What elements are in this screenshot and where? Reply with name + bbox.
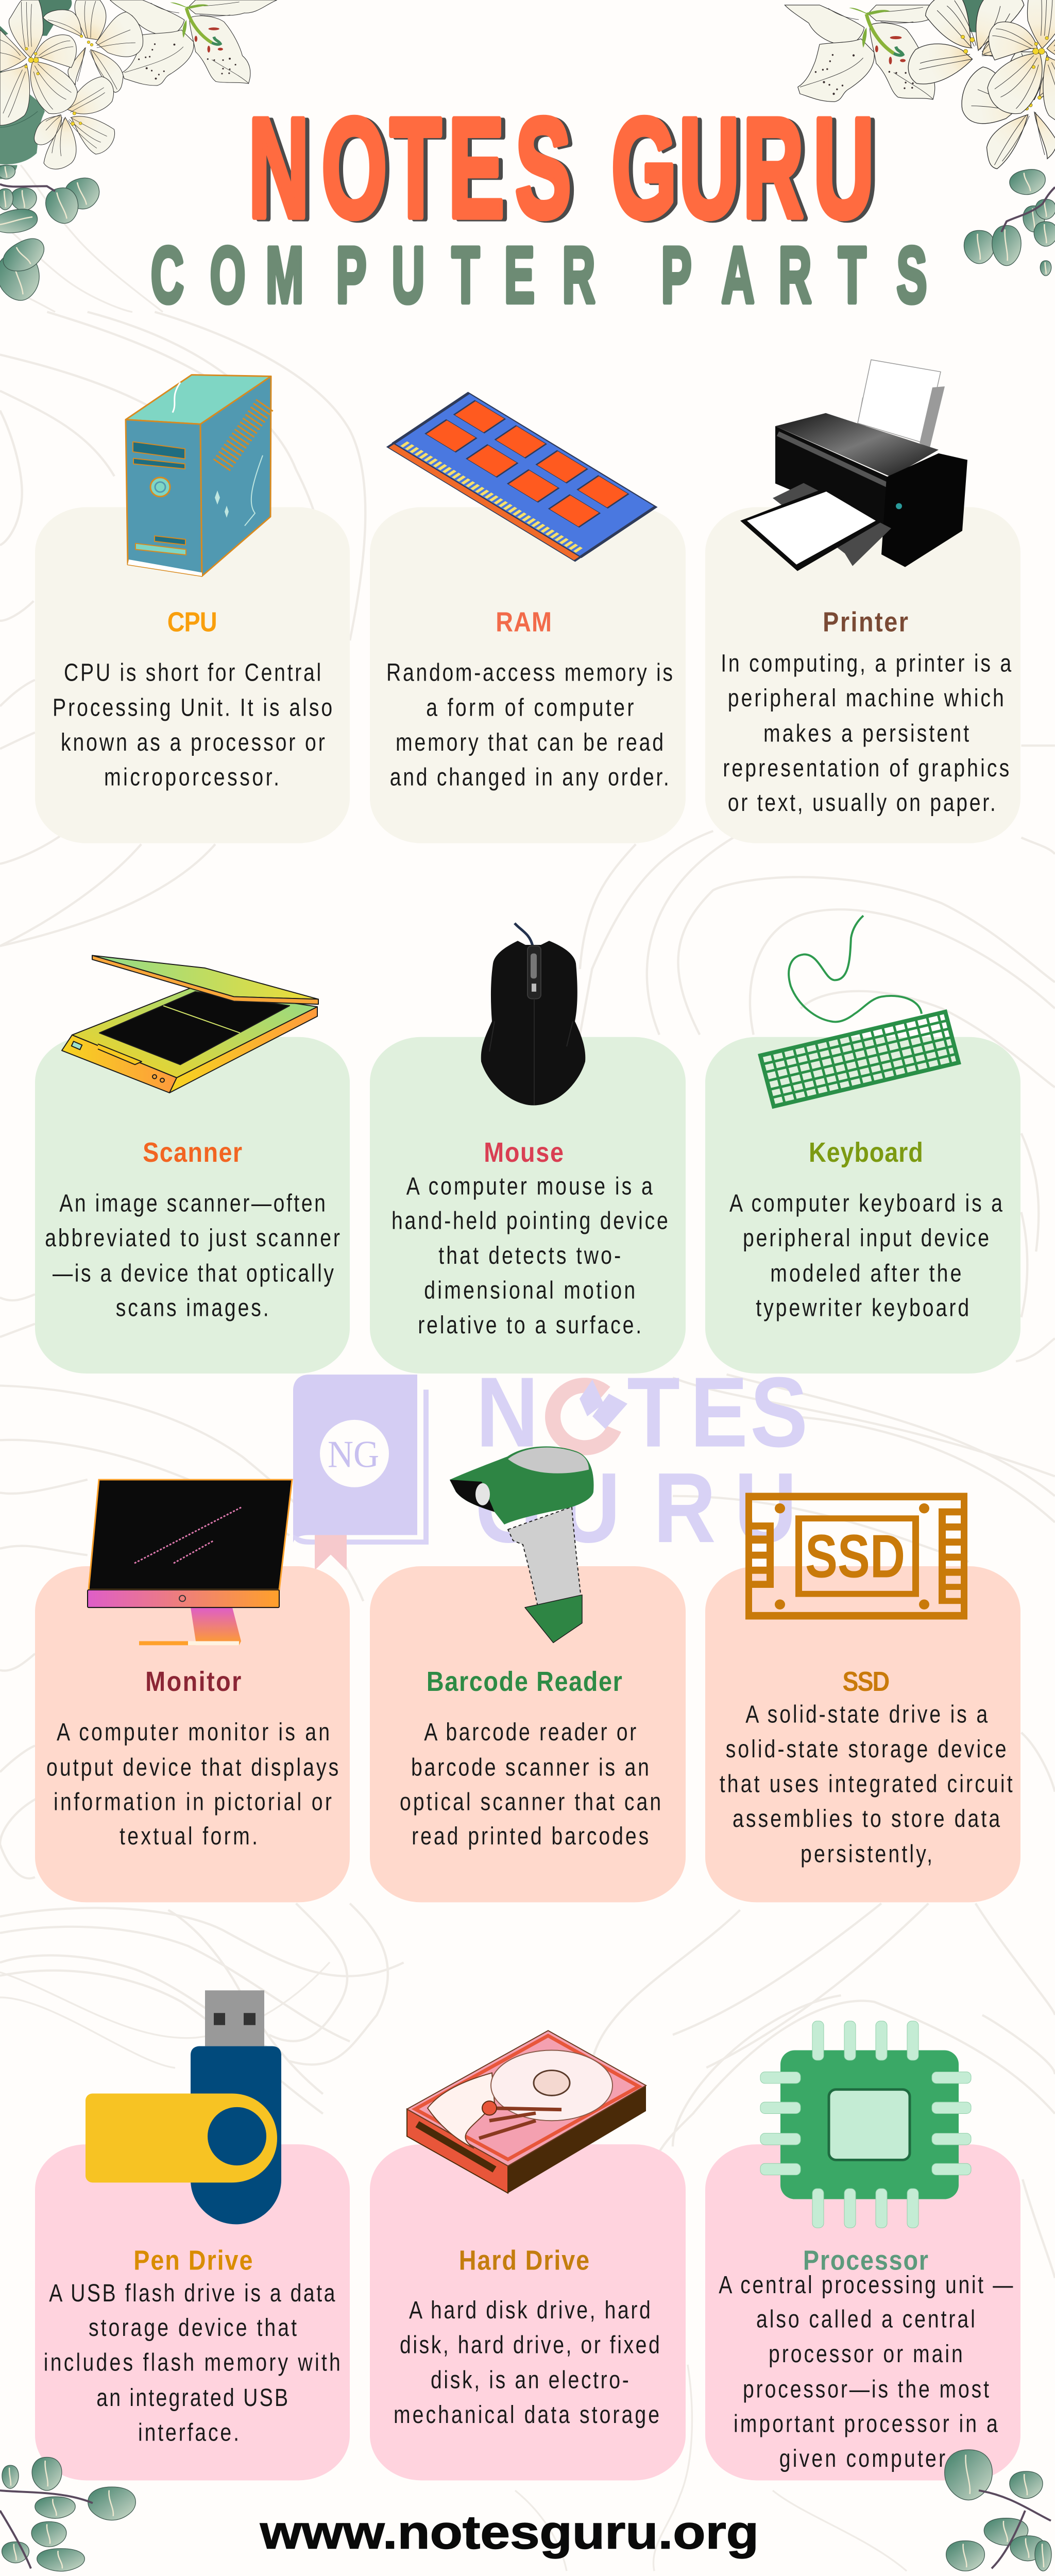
card background (370, 507, 686, 843)
description: Mouse: dimensional motion (424, 1277, 635, 1304)
heading: Barcode Reader: Barcode Reader (427, 1666, 622, 1697)
panel: Processor (705, 2021, 1020, 2480)
description: Keyboard (729, 1190, 1003, 1322)
card background (705, 1037, 1020, 1374)
card background (35, 507, 350, 843)
icon: processor chip (760, 2021, 971, 2228)
description: Processor: processor or main (769, 2340, 963, 2368)
icon: computer tower (126, 375, 271, 576)
description: Processor (719, 2272, 1013, 2472)
heading: Mouse: Mouse (484, 1137, 564, 1168)
heading: Scanner: Scanner (143, 1137, 242, 1168)
description: CPU: CPU is short for Central (64, 659, 321, 686)
panel: RAM (370, 393, 686, 843)
description: Processor: important processor in a (734, 2410, 998, 2438)
panel: CPU (35, 375, 350, 843)
panel: Mouse (370, 923, 686, 1374)
description: Mouse: hand-held pointing device (392, 1207, 668, 1235)
card background (35, 1566, 350, 1902)
panel: Keyboard (705, 916, 1020, 1374)
description: CPU: microporcessor. (104, 764, 279, 791)
watermark: Notes Guru logo: NTES (476, 1357, 808, 1468)
description: SSD: persistently, (801, 1840, 932, 1868)
description: SSD: A solid-state drive is a (745, 1701, 988, 1728)
description: Keyboard: typewriter keyboard (756, 1294, 969, 1322)
description: Monitor: information in pictorial or (54, 1788, 332, 1816)
description: Processor: A central processing unit — (719, 2272, 1013, 2299)
description: Mouse: relative to a surface. (418, 1311, 641, 1339)
description: Pen Drive (44, 2279, 341, 2446)
description: Printer: In computing, a printer is a (721, 650, 1012, 677)
description: Printer: or text, usually on paper. (728, 789, 996, 817)
description: Printer: makes a persistent (763, 720, 969, 747)
icon: printer (740, 360, 967, 571)
icon: USB pen drive (86, 1990, 281, 2224)
description: Keyboard: modeled after the (770, 1260, 961, 1287)
panel: Hard Drive (370, 2030, 686, 2480)
watermark: Notes Guru logo: NG (328, 1433, 379, 1476)
description: SSD (720, 1701, 1013, 1868)
description: Barcode Reader (400, 1718, 661, 1850)
panel: Monitor (35, 1480, 350, 1902)
description: Printer: peripheral machine which (728, 684, 1004, 712)
icon: computer mouse (481, 923, 585, 1106)
card background (705, 1566, 1020, 1902)
panel: SSD (705, 1493, 1020, 1902)
title: NOTES GURU: NOTES GURU (248, 89, 874, 247)
card background (705, 2144, 1020, 2480)
description: Scanner (45, 1190, 340, 1322)
icon: monitor (88, 1480, 292, 1645)
panel: Pen Drive (35, 1990, 350, 2480)
description: Processor: processor—is the most (743, 2376, 989, 2403)
description: RAM: a form of computer (426, 694, 634, 722)
description: SSD: solid-state storage device (726, 1735, 1007, 1763)
leaves: bottom left branch (0, 2458, 135, 2571)
card background (35, 2144, 350, 2480)
footer: website URL: www.notesguru.org (260, 2505, 759, 2558)
heading: Hard Drive: Hard Drive (459, 2244, 589, 2276)
description: Monitor (46, 1718, 338, 1850)
panel: Barcode Reader (370, 1446, 686, 1902)
heading: Printer: Printer (823, 606, 908, 637)
description: Hard Drive: disk, is an electro- (431, 2366, 629, 2394)
description: Monitor: textual form. (120, 1822, 258, 1850)
subtitle: COMPUTER PARTS: COMPUTER PARTS (151, 230, 927, 319)
card background (370, 1037, 686, 1374)
description: Printer (721, 650, 1012, 817)
description: SSD: assemblies to store data (733, 1805, 1000, 1833)
description: Hard Drive: mechanical data storage (394, 2401, 659, 2429)
heading: CPU: CPU (167, 606, 217, 637)
heading: Processor: Processor (803, 2244, 928, 2276)
card background (705, 507, 1020, 843)
icon: barcode reader (450, 1446, 594, 1642)
description: Pen Drive: storage device that (89, 2314, 297, 2342)
description: Hard Drive (394, 2296, 660, 2429)
description: Hard Drive: A hard disk drive, hard (409, 2296, 651, 2324)
heading: Keyboard: Keyboard (809, 1137, 923, 1168)
description: Monitor: A computer monitor is an (57, 1718, 330, 1746)
description: RAM: and changed in any order. (390, 764, 669, 791)
description: RAM (386, 659, 673, 791)
card background (35, 1037, 350, 1374)
description: CPU: known as a processor or (61, 728, 325, 756)
description: RAM: memory that can be read (396, 728, 663, 756)
description: Processor: also called a central (756, 2306, 975, 2333)
watermark: Notes Guru logo (293, 1357, 808, 1570)
heading: RAM: RAM (496, 606, 552, 637)
heading: Monitor: Monitor (145, 1666, 241, 1697)
icon: SSD board (745, 1493, 967, 1620)
description: Keyboard: peripheral input device (743, 1224, 989, 1252)
description: Barcode Reader: barcode scanner is an (411, 1754, 649, 1781)
description: CPU: Processing Unit. It is also (53, 694, 332, 722)
description: Barcode Reader: A barcode reader or (424, 1718, 636, 1746)
leaves: top left branch (0, 165, 103, 304)
leaves: bottom right branch (945, 2450, 1051, 2571)
description: Pen Drive: interface. (138, 2419, 239, 2446)
description: Mouse (392, 1173, 668, 1339)
description: Pen Drive: an integrated USB (96, 2384, 288, 2412)
description: Barcode Reader: optical scanner that can (400, 1788, 661, 1816)
icon: RAM module (387, 393, 656, 561)
description: Scanner: scans images. (116, 1294, 269, 1322)
icon: keyboard (760, 916, 959, 1106)
icon: flatbed scanner (62, 955, 318, 1093)
icon: SSD board: SSD (805, 1522, 905, 1590)
description: Barcode Reader: read printed barcodes (412, 1822, 649, 1850)
description: CPU (53, 659, 332, 791)
card background (370, 2144, 686, 2480)
heading: Pen Drive: Pen Drive (133, 2244, 252, 2276)
description: Processor: given computer. (779, 2445, 952, 2472)
description: Pen Drive: A USB flash drive is a data (49, 2279, 335, 2307)
flowers: top left (0, 0, 277, 179)
panel: Printer (705, 360, 1020, 843)
description: Keyboard: A computer keyboard is a (729, 1190, 1003, 1217)
description: Mouse: A computer mouse is a (406, 1173, 653, 1200)
card background (370, 1566, 686, 1902)
description: Hard Drive: disk, hard drive, or fixed (400, 2331, 660, 2359)
panel: Scanner (35, 955, 350, 1374)
description: Printer: representation of graphics (723, 754, 1009, 782)
description: Mouse: that detects two- (438, 1242, 621, 1269)
icon: hard disk drive (407, 2030, 646, 2193)
description: Scanner: An image scanner—often (59, 1190, 326, 1217)
heading: SSD: SSD (842, 1666, 890, 1697)
description: Pen Drive: includes flash memory with (44, 2349, 341, 2377)
leaves: top right branch (964, 167, 1055, 276)
watermark: Notes Guru logo: GURU (475, 1452, 797, 1564)
flowers: top right (785, 0, 1055, 169)
description: RAM: Random-access memory is (386, 659, 673, 686)
description: SSD: that uses integrated circuit (720, 1770, 1013, 1798)
description: Scanner: —is a device that optically (53, 1260, 334, 1287)
description: Scanner: abbreviated to just scanner (45, 1224, 340, 1252)
description: Monitor: output device that displays (46, 1754, 338, 1781)
